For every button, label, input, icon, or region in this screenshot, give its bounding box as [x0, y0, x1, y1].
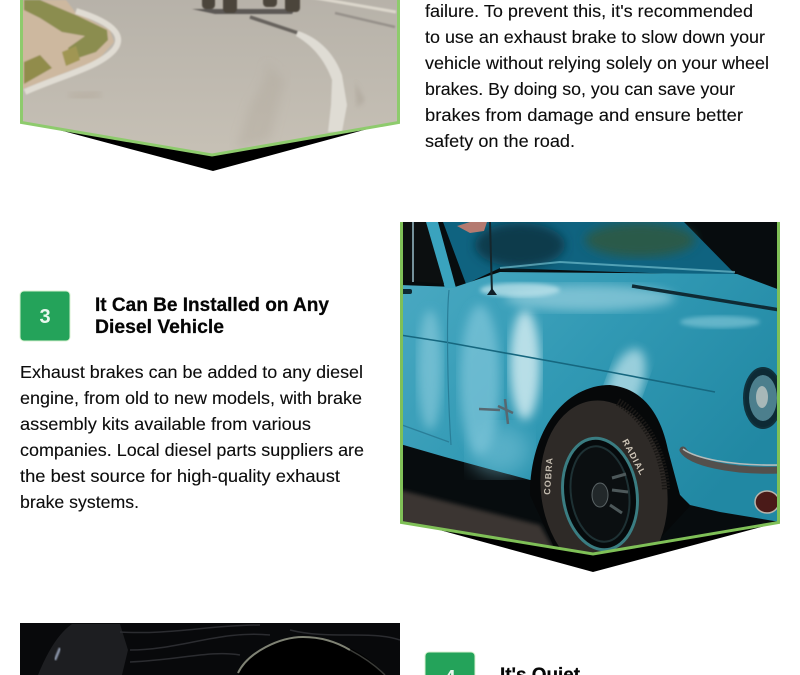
photo panel: dark wheel close-up	[20, 622, 400, 675]
road photo	[20, 0, 400, 160]
text block: section 2 body copy: brakes. By doing so, you can save your	[425, 79, 735, 99]
antenna and flag	[490, 222, 492, 294]
heading: section 3	[95, 295, 329, 338]
number badge 4	[425, 652, 475, 675]
vehicle tyres and shadow	[192, 9, 295, 14]
tyre lettering: RADIAL	[620, 437, 648, 477]
text block: section 2 body copy: failure. To prevent this, it's recommended	[425, 1, 753, 21]
tyre lettering: COBRA	[542, 457, 555, 495]
tyre	[540, 400, 668, 552]
black chevron shadow	[425, 526, 765, 572]
left side window	[424, 222, 444, 284]
text block: section 3 body copy: companies. Local diesel parts suppliers are	[20, 440, 364, 460]
rim opening and highlight	[238, 637, 385, 675]
curb	[25, 11, 118, 92]
number badge 3: 3	[39, 306, 51, 328]
text block: section 2 body copy: to use an exhaust brake to slow down your	[425, 27, 765, 47]
text block: section 2 body copy: vehicle without relying solely on your wheel	[425, 53, 769, 73]
hood highlights	[505, 285, 675, 311]
green frame	[22, 0, 398, 155]
hood stripe	[632, 286, 780, 310]
text block: section 2 body copy	[425, 1, 769, 151]
text block: section 2 body copy: brakes from damage and ensure better	[425, 105, 743, 125]
text block: section 3 body copy: assembly kits available from various	[20, 414, 311, 434]
windshield	[443, 222, 737, 284]
ground	[403, 488, 554, 546]
chrome bumper	[683, 450, 780, 470]
car body	[400, 272, 780, 522]
skid mark	[250, 17, 298, 33]
text block: section 3 body copy: engine, from old to new models, with brake	[20, 388, 362, 408]
side emblem	[479, 399, 513, 424]
roadside verge	[20, 0, 114, 90]
tyre tread lines	[120, 625, 400, 662]
headlight	[744, 368, 782, 428]
marker light	[755, 491, 779, 513]
wheel arch	[530, 385, 683, 546]
body crease and door gap	[400, 335, 715, 392]
text block: section 3 body copy: Exhaust brakes can be added to any diesel	[20, 362, 363, 382]
number badge 3	[20, 291, 70, 341]
car photo	[403, 222, 777, 552]
heading: section 3: Diesel Vehicle	[95, 317, 224, 338]
tyre lettering	[542, 437, 648, 495]
heading: section 3: It Can Be Installed on Any	[95, 295, 329, 316]
photo panel: blue classic car with green chevron frame	[400, 222, 782, 588]
green frame	[402, 222, 778, 554]
white road line	[296, 31, 347, 132]
text block: section 3 body copy: the best source for high-quality exhaust	[20, 466, 340, 486]
rim	[561, 436, 639, 551]
text block: section 2 body copy: safety on the road.	[425, 131, 575, 151]
text block: section 3 body copy	[20, 362, 364, 512]
text block: section 3 body copy: brake systems.	[20, 492, 139, 512]
photo panel: curved road with green chevron frame	[20, 0, 400, 171]
windscreen pillar	[424, 222, 456, 288]
black chevron shadow	[48, 127, 375, 171]
